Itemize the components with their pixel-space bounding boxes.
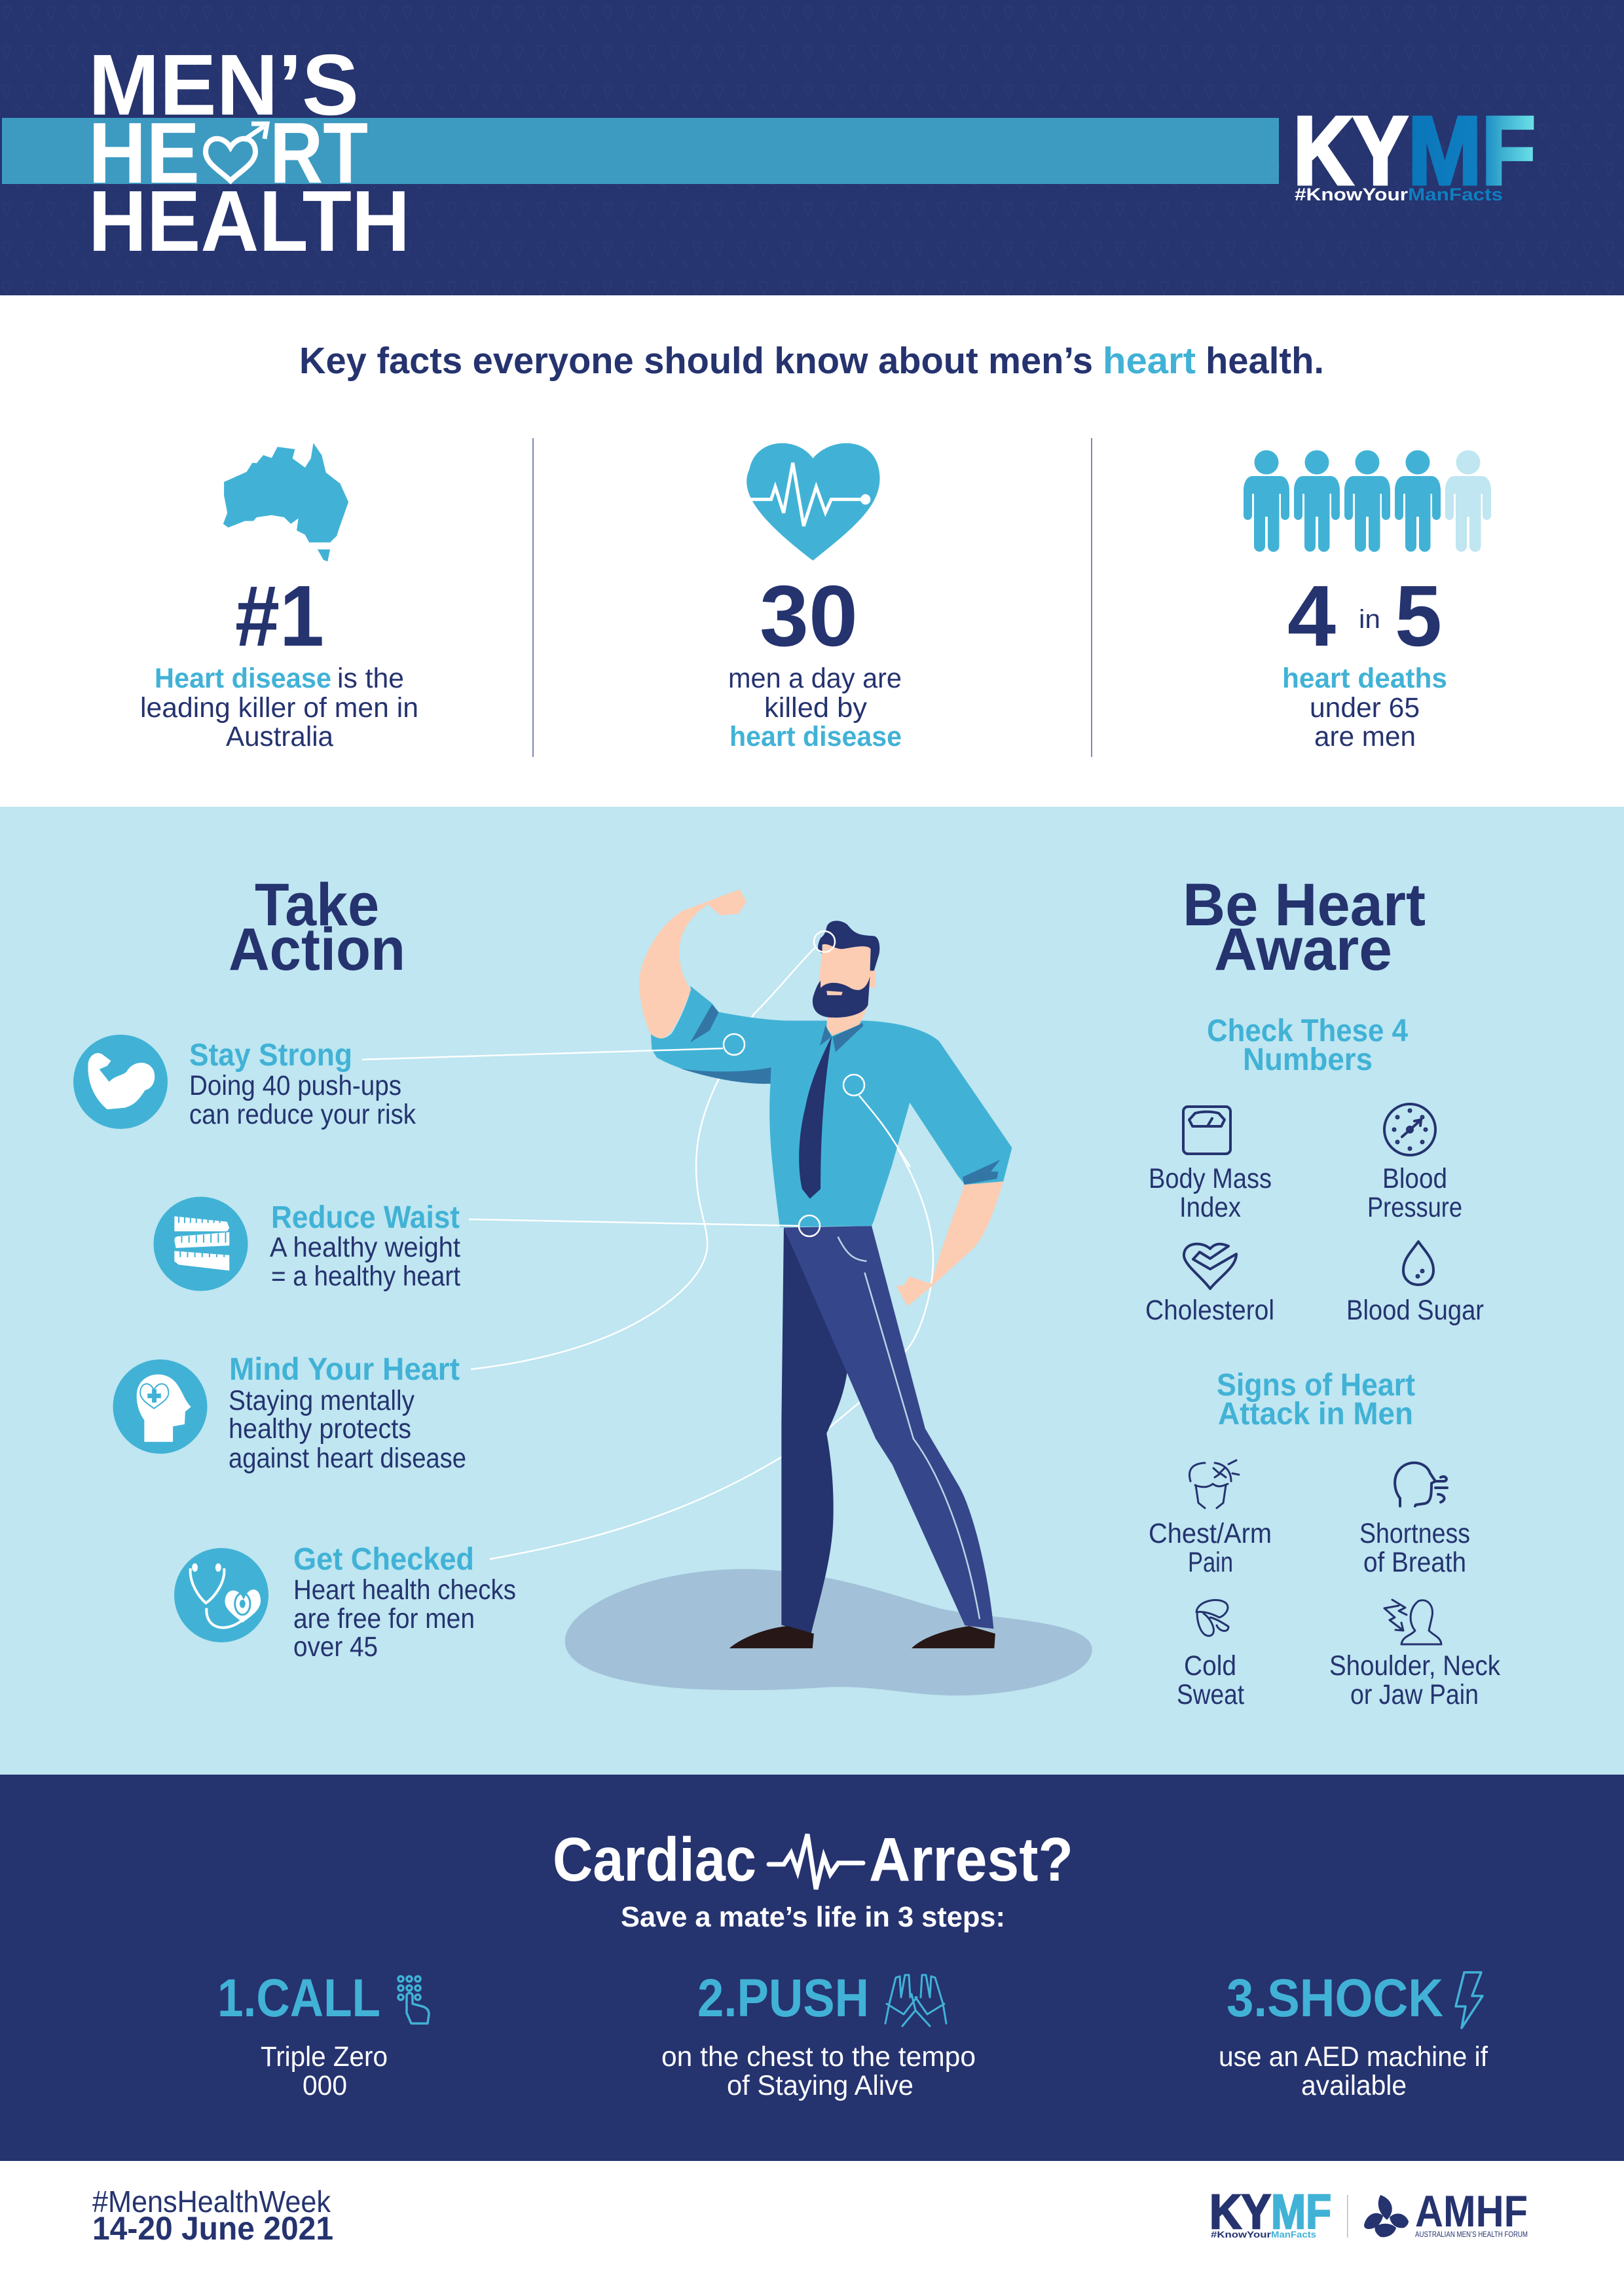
text: fact 1 description: Heart disease xyxy=(155,663,331,694)
item: Mind Your Heart: Mind Your Heart xyxy=(229,1352,460,1387)
icon: pulse line xyxy=(769,1834,863,1889)
number: 30: 30 xyxy=(760,568,858,664)
text: step 2 description xyxy=(661,2041,976,2101)
logo: KYMF xyxy=(1293,97,1536,205)
text: fact 3 description: under 65 xyxy=(1310,692,1420,724)
text: step 3 description: available xyxy=(1301,2070,1407,2101)
item: Stay Strong xyxy=(73,1035,416,1130)
icon: head with heart xyxy=(137,1374,191,1442)
footer: hashtag and date xyxy=(92,2185,333,2247)
icon: blood drop xyxy=(1403,1242,1433,1285)
text: fact 2 description: men a day are xyxy=(728,663,902,694)
subheading: Check These 4 Numbers: Numbers xyxy=(1243,1042,1373,1077)
item: Get Checked: Get Checked xyxy=(293,1542,474,1577)
item: Stay Strong: can reduce your risk xyxy=(189,1099,416,1130)
callout lines behind figure xyxy=(471,947,933,1559)
footer logo: KYMF: KY xyxy=(1209,2185,1271,2239)
item: Blood Sugar: Blood Sugar xyxy=(1346,1295,1484,1326)
item: Mind Your Heart: healthy protects xyxy=(229,1413,411,1445)
icon: measuring tape xyxy=(174,1216,229,1270)
panel: fact 1 xyxy=(140,443,418,752)
item: Stay Strong: Stay Strong xyxy=(189,1038,352,1073)
text: step 3 description: use an AED machine if xyxy=(1219,2041,1488,2073)
item: Body Mass Index: Index xyxy=(1179,1192,1241,1223)
subheading: Signs of Heart Attack in Men: Signs of Heart xyxy=(1217,1368,1415,1403)
text: fact 1 description xyxy=(140,663,418,752)
header stripe xyxy=(2,118,1279,184)
item: Mind Your Heart: against heart disease xyxy=(229,1443,466,1474)
item: Shoulder, Neck or Jaw Pain: Shoulder, Neck xyxy=(1329,1650,1500,1682)
subheading: Signs of Heart Attack in Men xyxy=(1217,1368,1415,1431)
title: Men's Heart Health: MEN’S xyxy=(88,37,359,133)
heading: Be Heart Aware: Be Heart xyxy=(1183,872,1426,938)
illustration: ground shadow xyxy=(565,1569,1092,1695)
item: Get Checked: are free for men xyxy=(293,1603,475,1634)
footer logo: KYMF: #KnowYour xyxy=(1211,2229,1272,2240)
item: Shortness of Breath: Shortness xyxy=(1359,1518,1470,1549)
footer: hashtag and date: 14-20 June 2021 xyxy=(92,2210,333,2247)
item: Shoulder, Neck or Jaw Pain: or Jaw Pain xyxy=(1350,1679,1479,1710)
item: Shortness of Breath xyxy=(1359,1463,1470,1578)
item: Cold Sweat: Sweat xyxy=(1177,1679,1244,1710)
number: 4 in 5: 4 xyxy=(1287,568,1336,664)
icon: keypad hand xyxy=(398,1976,429,2023)
icon: shoulder and jaw pain xyxy=(1384,1600,1441,1644)
item: Blood Pressure xyxy=(1367,1104,1462,1223)
number: 4 in 5: in xyxy=(1359,605,1380,634)
item: Reduce Waist: Reduce Waist xyxy=(271,1200,460,1235)
logo: KYMF: MF xyxy=(1408,97,1536,205)
number: #1: #1 xyxy=(235,568,324,664)
panel: fact 3 xyxy=(1244,451,1491,752)
item: Cholesterol: Cholesterol xyxy=(1145,1295,1274,1326)
item: Chest/Arm Pain xyxy=(1149,1460,1272,1578)
icon: lightning bolt xyxy=(1456,1972,1483,2028)
text: fact 3 description xyxy=(1282,663,1447,752)
heading: Cardiac Arrest? xyxy=(553,1825,1073,1894)
illustration: man flexing xyxy=(639,889,1012,1648)
item: Get Checked: Heart health checks xyxy=(293,1574,516,1606)
text: step 2 description: on the chest to the tempo xyxy=(661,2041,976,2073)
title: Men's Heart Health: HE xyxy=(88,105,200,201)
item: Chest/Arm Pain: Chest/Arm xyxy=(1149,1518,1272,1549)
heading: Be Heart Aware: Aware xyxy=(1214,916,1392,983)
footer logo: AMHF: AMHF xyxy=(1415,2186,1528,2236)
text: fact 2 description: killed by xyxy=(764,692,867,724)
item: Reduce Waist: A healthy weight xyxy=(270,1232,460,1263)
item: Reduce Waist: = a healthy heart xyxy=(271,1261,460,1292)
footer logo: AMHF xyxy=(1364,2186,1528,2239)
item: Get Checked: over 45 xyxy=(293,1631,378,1663)
text: fact 1 description: Australia xyxy=(226,721,333,752)
icon: AMHF symbol xyxy=(1364,2195,1409,2237)
item: Cold Sweat xyxy=(1177,1600,1244,1710)
heading: Take Action: Take xyxy=(255,872,379,938)
text: step 1 description: Triple Zero xyxy=(261,2041,388,2073)
panel: header banner xyxy=(0,0,1624,295)
item: Cholesterol xyxy=(1145,1244,1274,1326)
text: step 1 description xyxy=(261,2041,388,2101)
text: fact 3 description: are men xyxy=(1314,721,1416,752)
text: step 3 description xyxy=(1219,2041,1488,2101)
text: fact 2 description: heart disease xyxy=(729,721,902,752)
text: fact 2 description xyxy=(728,663,902,752)
step 2: push: 2.PUSH xyxy=(697,1968,869,2028)
text: step 2 description: of Staying Alive xyxy=(727,2070,913,2101)
item: Get Checked xyxy=(174,1542,516,1663)
subheading: Check These 4 Numbers: Check These 4 xyxy=(1207,1014,1408,1048)
icon: head breathing xyxy=(1395,1463,1447,1506)
heading: Be Heart Aware xyxy=(1183,872,1426,983)
heading: key facts: health. xyxy=(1206,340,1324,382)
icon: heart with pulse xyxy=(747,443,880,561)
icon: chest pain xyxy=(1189,1460,1239,1508)
icon: sweat drops xyxy=(1196,1600,1228,1636)
item: Reduce Waist xyxy=(153,1197,460,1292)
heading: key facts: heart xyxy=(1103,340,1196,382)
item: Mind Your Heart: Staying mentally xyxy=(229,1385,415,1416)
icon: chevron heart xyxy=(1184,1244,1236,1289)
logo: KYMF: ManFacts xyxy=(1408,185,1503,204)
subheading: save a mate's life: Save a mate’s life in 3 steps: xyxy=(621,1901,1005,1933)
item: Shortness of Breath: of Breath xyxy=(1363,1547,1466,1578)
subheading: Check These 4 Numbers xyxy=(1207,1014,1408,1077)
footer logo: KYMF: MF xyxy=(1271,2185,1331,2239)
title: Men's Heart Health: RT xyxy=(270,105,368,201)
logo: KYMF: #KnowYour xyxy=(1295,185,1409,204)
heading: key facts: Key facts everyone should know about men’s xyxy=(299,340,1093,382)
icon: Australia map xyxy=(223,443,348,561)
panel: light blue middle section xyxy=(0,807,1624,1775)
item: Blood Pressure: Blood xyxy=(1382,1163,1447,1194)
icon: pushing hands xyxy=(885,1975,946,2026)
footer logo: AMHF: AUSTRALIAN MEN’S HEALTH FORUM xyxy=(1415,2230,1528,2239)
item: Cold Sweat: Cold xyxy=(1184,1650,1236,1682)
icon: five people, four highlighted xyxy=(1244,451,1491,552)
number: 4 in 5: 5 xyxy=(1395,568,1442,664)
footer: hashtag and date: #MensHealthWeek xyxy=(92,2185,331,2219)
step 3: shock: 3.SHOCK xyxy=(1227,1968,1443,2028)
title: Men's Heart Health xyxy=(88,37,410,269)
icon: stethoscope and heart xyxy=(191,1563,261,1628)
callout lines and rings on figure xyxy=(362,931,910,1236)
item: Blood Sugar xyxy=(1346,1242,1484,1326)
text: fact 1 description: leading killer of men in xyxy=(140,692,418,724)
heading: Cardiac Arrest?: Cardiac xyxy=(553,1825,756,1894)
title: Men's Heart Health: HEALTH xyxy=(88,173,410,269)
step 1: call: 1.CALL xyxy=(217,1968,380,2028)
item: Body Mass Index xyxy=(1149,1107,1272,1223)
icon: bicep xyxy=(88,1053,155,1109)
item: Body Mass Index: Body Mass xyxy=(1149,1163,1272,1194)
footer logo: KYMF xyxy=(1209,2185,1331,2240)
subheading: Signs of Heart Attack in Men: Attack in Men xyxy=(1218,1397,1413,1431)
item: Blood Pressure: Pressure xyxy=(1367,1192,1462,1223)
item: Chest/Arm Pain: Pain xyxy=(1188,1547,1233,1578)
panel: cardiac arrest xyxy=(0,1775,1624,2161)
icon: pressure gauge xyxy=(1384,1104,1435,1155)
number: 4 in 5 xyxy=(1287,568,1442,664)
footer logo: KYMF: ManFacts xyxy=(1271,2229,1316,2240)
text: fact 3 description: heart deaths xyxy=(1282,663,1447,694)
text: step 1 description: 000 xyxy=(303,2070,347,2101)
heading: Cardiac Arrest?: Arrest? xyxy=(869,1825,1073,1894)
logo: KYMF: KY xyxy=(1293,97,1408,205)
heading: Take Action xyxy=(229,872,405,983)
panel: fact 2 xyxy=(728,443,902,752)
item: Shoulder, Neck or Jaw Pain xyxy=(1329,1600,1500,1710)
heading: Take Action: Action xyxy=(229,916,405,983)
text: fact 1 description: is the xyxy=(337,663,404,694)
icon: scales xyxy=(1183,1107,1230,1154)
item: Stay Strong: Doing 40 push-ups xyxy=(189,1070,401,1101)
item: Mind Your Heart xyxy=(113,1352,466,1474)
